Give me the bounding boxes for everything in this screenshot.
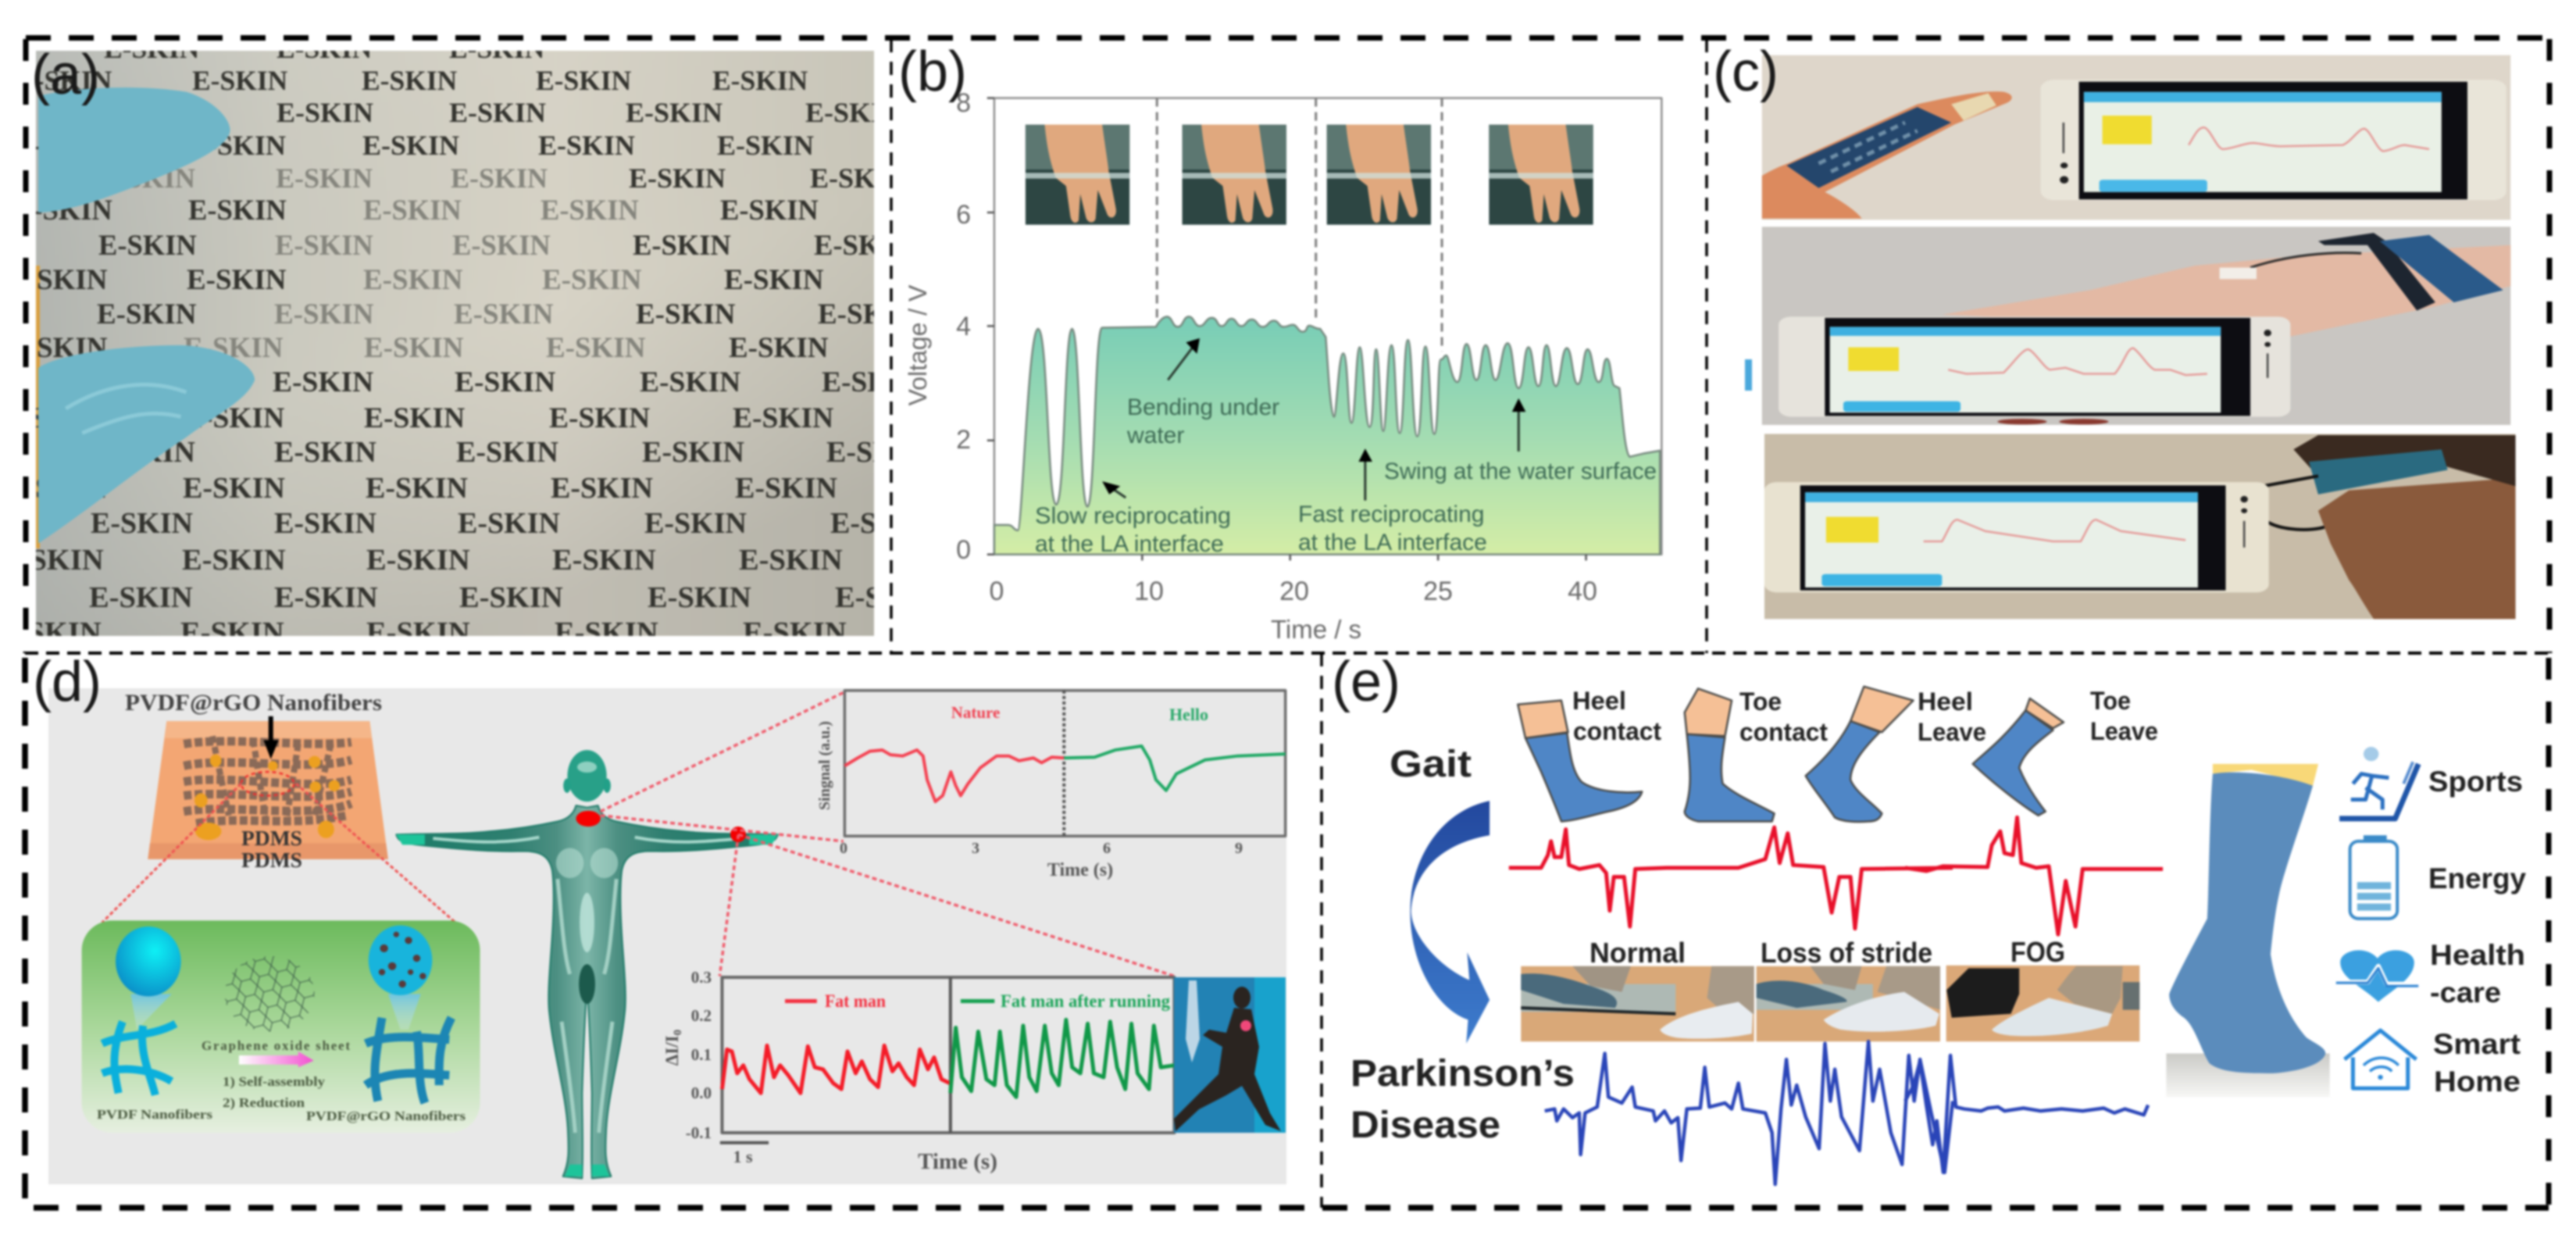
axis labels and ticks: 8: [956, 88, 971, 118]
chart annotations: Swing at the water surface: [1384, 459, 1657, 484]
chart: speech signal, Nature and Hello: 9: [1235, 840, 1243, 857]
E-SKIN printed text pattern: E-SKIN: [724, 264, 824, 296]
E-SKIN printed text pattern: E-SKIN: [642, 436, 744, 469]
E-SKIN printed text pattern: E-SKIN: [640, 366, 740, 398]
E-SKIN printed text pattern: E-SKIN: [720, 194, 819, 226]
E-SKIN printed text pattern: E-SKIN: [454, 298, 554, 330]
chart: pulse signal, fat man: 0.2: [691, 1006, 712, 1025]
E-SKIN printed text pattern: E-SKIN: [273, 366, 373, 398]
panel a: E-SKIN film photo: [34, 49, 876, 637]
axis labels and ticks: Time / s: [1271, 615, 1361, 644]
inset captions: PVDF Nanofibers: [97, 1107, 212, 1122]
heading: PVDF@rGO Nanofibers: PVDF@rGO Nanofibers: [125, 690, 382, 716]
E-SKIN printed text pattern: E-SKIN: [14, 194, 112, 226]
blue Parkinson's signal: [1545, 1041, 2148, 1184]
E-SKIN printed text pattern: E-SKIN: [810, 162, 907, 194]
chart: speech signal, Nature and Hello: Singnal (a.u.): [816, 721, 833, 810]
chart: pulse signal, fat man: 0: [672, 1030, 684, 1035]
heading: Parkinson's Disease: Disease: [1350, 1105, 1500, 1146]
label (c): (c): [1713, 41, 1779, 103]
E-SKIN printed text pattern: E-SKIN: [184, 402, 284, 434]
E-SKIN printed text pattern: E-SKIN: [363, 264, 463, 296]
E-SKIN printed text pattern: E-SKIN: [644, 507, 747, 540]
E-SKIN printed text pattern: E-SKIN: [184, 332, 284, 364]
PDMS device slab: [148, 716, 388, 859]
chart: speech signal, Nature and Hello: 3: [972, 840, 979, 857]
PDMS labels: PDMS: [241, 826, 302, 850]
E-SKIN printed text pattern: E-SKIN: [648, 581, 751, 614]
E-SKIN printed text pattern: E-SKIN: [364, 402, 465, 434]
chart: pulse signal, fat man: 0.1: [691, 1045, 712, 1064]
E-SKIN printed text pattern: E-SKIN: [183, 472, 285, 505]
E-SKIN printed text pattern: E-SKIN: [452, 229, 551, 261]
chart: speech signal, Nature and Hello: 6: [1103, 840, 1111, 857]
E-SKIN printed text pattern: E-SKIN: [180, 616, 284, 649]
E-SKIN printed text pattern: E-SKIN: [182, 544, 286, 577]
application icons: [2336, 747, 2418, 1088]
E-SKIN printed text pattern: E-SKIN: [192, 65, 288, 96]
chart annotations: [1035, 395, 1657, 557]
E-SKIN printed text pattern: E-SKIN: [97, 298, 197, 330]
axis labels and ticks: Voltage / V: [904, 284, 932, 405]
chart annotations: at the LA interface: [1298, 530, 1487, 555]
label (b): (b): [898, 41, 967, 103]
gait stage labels: Heel: [1918, 687, 1973, 716]
label (a): (a): [31, 44, 100, 106]
panel d: PVDF@rGO nanofibers: [48, 688, 1286, 1184]
E-SKIN printed text pattern: E-SKIN: [636, 298, 736, 330]
application labels: [2428, 766, 2526, 1098]
E-SKIN printed text pattern: E-SKIN: [458, 507, 560, 540]
chart annotations: at the LA interface: [1035, 531, 1224, 557]
photos: Normal, Loss of stride: [1521, 966, 1940, 1041]
axis labels and ticks: 0: [990, 577, 1004, 606]
E-SKIN printed text pattern: E-SKIN: [546, 332, 646, 364]
E-SKIN printed text pattern: E-SKIN: [555, 616, 658, 649]
E-SKIN printed text pattern: E-SKIN: [717, 130, 814, 161]
application labels: -care: [2430, 977, 2501, 1009]
application labels: Health: [2430, 939, 2525, 971]
heading: Parkinson's Disease: [1350, 1053, 1575, 1146]
green rounded box: [82, 920, 480, 1133]
E-SKIN printed text pattern: E-SKIN: [830, 507, 933, 540]
chart: speech signal, Nature and Hello: Time (s): [1047, 860, 1113, 880]
E-SKIN printed text pattern: E-SKIN: [552, 544, 656, 577]
icon: battery: [2350, 835, 2397, 919]
red gait signal: [1509, 817, 2163, 934]
gait stage labels: [1572, 687, 2158, 746]
gait stage labels: Leave: [1918, 718, 1986, 746]
E-SKIN printed text pattern: E-SKIN: [189, 130, 286, 161]
chart annotations: Slow reciprocating: [1035, 503, 1231, 529]
E-SKIN printed text pattern: E-SKIN: [5, 472, 108, 505]
E-SKIN printed text pattern: E-SKIN: [366, 544, 470, 577]
photo captions: FOG: [2010, 936, 2065, 968]
axis labels and ticks: 25: [1423, 577, 1453, 606]
E-SKIN printed text pattern: E-SKIN: [104, 33, 200, 64]
gait stage labels: Heel: [1572, 687, 1626, 715]
E-SKIN printed text pattern: E-SKIN: [805, 97, 902, 128]
E-SKIN printed text pattern: E-SKIN: [89, 581, 193, 614]
E-SKIN printed text pattern: E-SKIN: [366, 616, 470, 649]
E-SKIN printed text pattern: E-SKIN: [449, 97, 546, 128]
E-SKIN printed text pattern: E-SKIN: [551, 472, 653, 505]
chart: pulse signal, fat man: 1 s: [733, 1147, 753, 1166]
E-SKIN printed text pattern: E-SKIN: [91, 366, 191, 398]
E-SKIN printed text pattern: [34, 49, 876, 637]
E-SKIN printed text pattern: E-SKIN: [733, 402, 833, 434]
icon: heart with pulse: [2336, 950, 2418, 1002]
E-SKIN printed text pattern: E-SKIN: [814, 229, 912, 261]
E-SKIN printed text pattern: E-SKIN: [277, 33, 373, 64]
chart: pulse signal, fat man: Fat man after running: [1001, 991, 1170, 1011]
axis labels and ticks: 4: [956, 312, 971, 341]
runner image: [1174, 977, 1286, 1133]
gait stage labels: Leave: [2090, 717, 2158, 745]
E-SKIN printed text pattern: E-SKIN: [102, 97, 198, 128]
panel e: smart sock gait monitoring: [1350, 687, 2526, 1184]
photo captions: Loss of stride: [1761, 937, 1932, 969]
E-SKIN printed text pattern: E-SKIN: [455, 366, 555, 398]
E-SKIN printed text pattern: E-SKIN: [549, 402, 650, 434]
E-SKIN printed text pattern: E-SKIN: [277, 97, 373, 128]
label (d): (d): [33, 651, 102, 713]
E-SKIN printed text pattern: E-SKIN: [743, 616, 847, 649]
E-SKIN printed text pattern: E-SKIN: [0, 544, 104, 577]
E-SKIN printed text pattern: E-SKIN: [187, 264, 287, 296]
heading: Parkinson's Disease: Parkinson’s: [1350, 1053, 1575, 1094]
blue sliver: [1745, 359, 1752, 391]
plot area with filled voltage curve: [987, 98, 1661, 561]
chart: speech signal, Nature and Hello: Hello: [1169, 705, 1208, 724]
E-SKIN printed text pattern: E-SKIN: [8, 264, 108, 296]
chart annotations: Fast reciprocating: [1298, 502, 1484, 527]
heading: Gait: Gait: [1390, 744, 1472, 785]
label (e): (e): [1332, 651, 1400, 713]
E-SKIN printed text pattern: E-SKIN: [626, 97, 722, 128]
gait stage labels: Toe: [2090, 687, 2131, 715]
E-SKIN printed text pattern: E-SKIN: [826, 436, 929, 469]
axis labels and ticks: 2: [956, 425, 971, 455]
chart: speech signal, Nature and Hello: Nature: [951, 703, 1000, 722]
application labels: Home: [2434, 1066, 2521, 1098]
axis labels and ticks: 40: [1568, 577, 1597, 606]
E-SKIN printed text pattern: E-SKIN: [456, 436, 558, 469]
photo insets of hand in water: [1026, 125, 1593, 225]
E-SKIN printed text pattern: E-SKIN: [274, 507, 376, 540]
gloved fingers: [38, 87, 255, 544]
human body figure: [396, 750, 778, 1178]
inset captions: 2) Reduction: [223, 1095, 305, 1110]
PDMS labels: [241, 826, 302, 872]
inset captions: PVDF@rGO Nanofibers: [306, 1109, 466, 1123]
axis labels and ticks: 6: [956, 200, 971, 230]
E-SKIN printed text pattern: E-SKIN: [541, 194, 639, 226]
inset captions: 1) Self-assembly: [223, 1074, 326, 1089]
E-SKIN printed text pattern: E-SKIN: [536, 65, 632, 96]
icon: sports treadmill: [2339, 747, 2418, 819]
E-SKIN printed text pattern: E-SKIN: [362, 65, 458, 96]
application labels: Energy: [2428, 862, 2526, 894]
E-SKIN printed text pattern: E-SKIN: [274, 436, 376, 469]
E-SKIN printed text pattern: E-SKIN: [98, 229, 197, 261]
sensor dot on arm: [730, 827, 746, 842]
arrows: [1102, 338, 1525, 501]
chart: pulse signal, fat man: 0.3: [691, 968, 712, 987]
E-SKIN printed text pattern: E-SKIN: [91, 507, 193, 540]
chart: pulse signal, fat man: 0.0: [691, 1084, 712, 1102]
icons: four sock positions: [1518, 687, 2064, 822]
panel c: wearable sensor photos: [1745, 55, 2516, 619]
E-SKIN printed text pattern: E-SKIN: [459, 581, 563, 614]
nanofiber balls and meshes: [102, 925, 451, 1103]
E-SKIN printed text pattern: E-SKIN: [276, 162, 373, 194]
application labels: Sports: [2428, 766, 2523, 798]
axis labels and ticks: [904, 88, 1597, 644]
panel b: voltage chart: [904, 88, 1661, 644]
E-SKIN printed text pattern: E-SKIN: [542, 264, 642, 296]
photo: wrist sensor and phone: [1762, 227, 2510, 425]
E-SKIN printed text pattern: E-SKIN: [822, 366, 922, 398]
arrow: curved gait to Parkinson's: [1410, 801, 1490, 1044]
E-SKIN printed text pattern: E-SKIN: [729, 332, 829, 364]
chart: pulse signal, fat man: Fat man: [825, 991, 886, 1011]
axis labels and ticks: 0: [956, 535, 971, 565]
photo background: [36, 51, 874, 636]
inset: self-assembly schematic: [82, 920, 480, 1133]
E-SKIN printed text pattern: E-SKIN: [364, 332, 464, 364]
photo: glasses sensor and phone: [1764, 434, 2516, 619]
icon: smart home: [2345, 1030, 2417, 1088]
PDMS labels: PDMS: [241, 848, 302, 872]
E-SKIN printed text pattern: E-SKIN: [274, 298, 374, 330]
gait stage labels: Toe: [1739, 687, 1782, 716]
E-SKIN printed text pattern: E-SKIN: [449, 33, 545, 64]
axis labels and ticks: 10: [1134, 577, 1164, 606]
chart annotations: Bending under: [1127, 395, 1279, 420]
E-SKIN printed text pattern: E-SKIN: [835, 581, 939, 614]
E-SKIN printed text pattern: E-SKIN: [275, 229, 373, 261]
E-SKIN printed text pattern: E-SKIN: [451, 162, 548, 194]
E-SKIN printed text pattern: E-SKIN: [274, 581, 378, 614]
E-SKIN printed text pattern: E-SKIN: [93, 436, 195, 469]
zoom lines to charts: [601, 692, 1174, 976]
chart: speech signal, Nature and Hello: [816, 691, 1286, 880]
smart sock illustration: [2166, 764, 2330, 1097]
chart: pulse signal, fat man: Time (s): [918, 1149, 997, 1174]
E-SKIN printed text pattern: E-SKIN: [14, 130, 111, 161]
E-SKIN printed text pattern: E-SKIN: [8, 332, 108, 364]
inset captions: [97, 1038, 466, 1123]
grey background: [48, 688, 1286, 1184]
chart: speech signal, Nature and Hello: 0: [840, 840, 847, 857]
axis labels and ticks: 20: [1279, 577, 1309, 606]
gait stage labels: contact: [1739, 718, 1828, 746]
E-SKIN printed text pattern: E-SKIN: [363, 194, 462, 226]
E-SKIN printed text pattern: E-SKIN: [98, 162, 195, 194]
E-SKIN printed text pattern: E-SKIN: [739, 544, 843, 577]
E-SKIN printed text pattern: E-SKIN: [0, 402, 101, 434]
photo captions: [1589, 936, 2065, 969]
gait stage labels: contact: [1573, 717, 1661, 745]
photo: finger sensor and phone: [1762, 55, 2510, 220]
E-SKIN printed text pattern: E-SKIN: [629, 162, 726, 194]
E-SKIN printed text pattern: E-SKIN: [712, 65, 808, 96]
E-SKIN printed text pattern: E-SKIN: [0, 616, 102, 649]
E-SKIN printed text pattern: E-SKIN: [735, 472, 837, 505]
chart: pulse signal, fat man: [662, 968, 1174, 1174]
photo captions: Normal: [1589, 937, 1686, 969]
E-SKIN printed text pattern: E-SKIN: [633, 229, 731, 261]
chart: pulse signal, fat man: ΔI/I: [662, 1035, 682, 1066]
E-SKIN printed text pattern: E-SKIN: [366, 472, 468, 505]
E-SKIN printed text pattern: E-SKIN: [818, 298, 918, 330]
E-SKIN printed text pattern: E-SKIN: [538, 130, 635, 161]
zoom lines to inset: [102, 784, 455, 923]
inset captions: Graphene oxide sheet: [202, 1038, 350, 1053]
photo: FOG: [1946, 966, 2139, 1041]
E-SKIN printed text pattern: E-SKIN: [16, 65, 112, 96]
chart annotations: water: [1126, 423, 1184, 448]
chart: pulse signal, fat man: -0.1: [686, 1123, 712, 1142]
E-SKIN printed text pattern: E-SKIN: [362, 130, 459, 161]
application labels: Smart: [2433, 1028, 2521, 1060]
E-SKIN printed text pattern: E-SKIN: [188, 194, 287, 226]
